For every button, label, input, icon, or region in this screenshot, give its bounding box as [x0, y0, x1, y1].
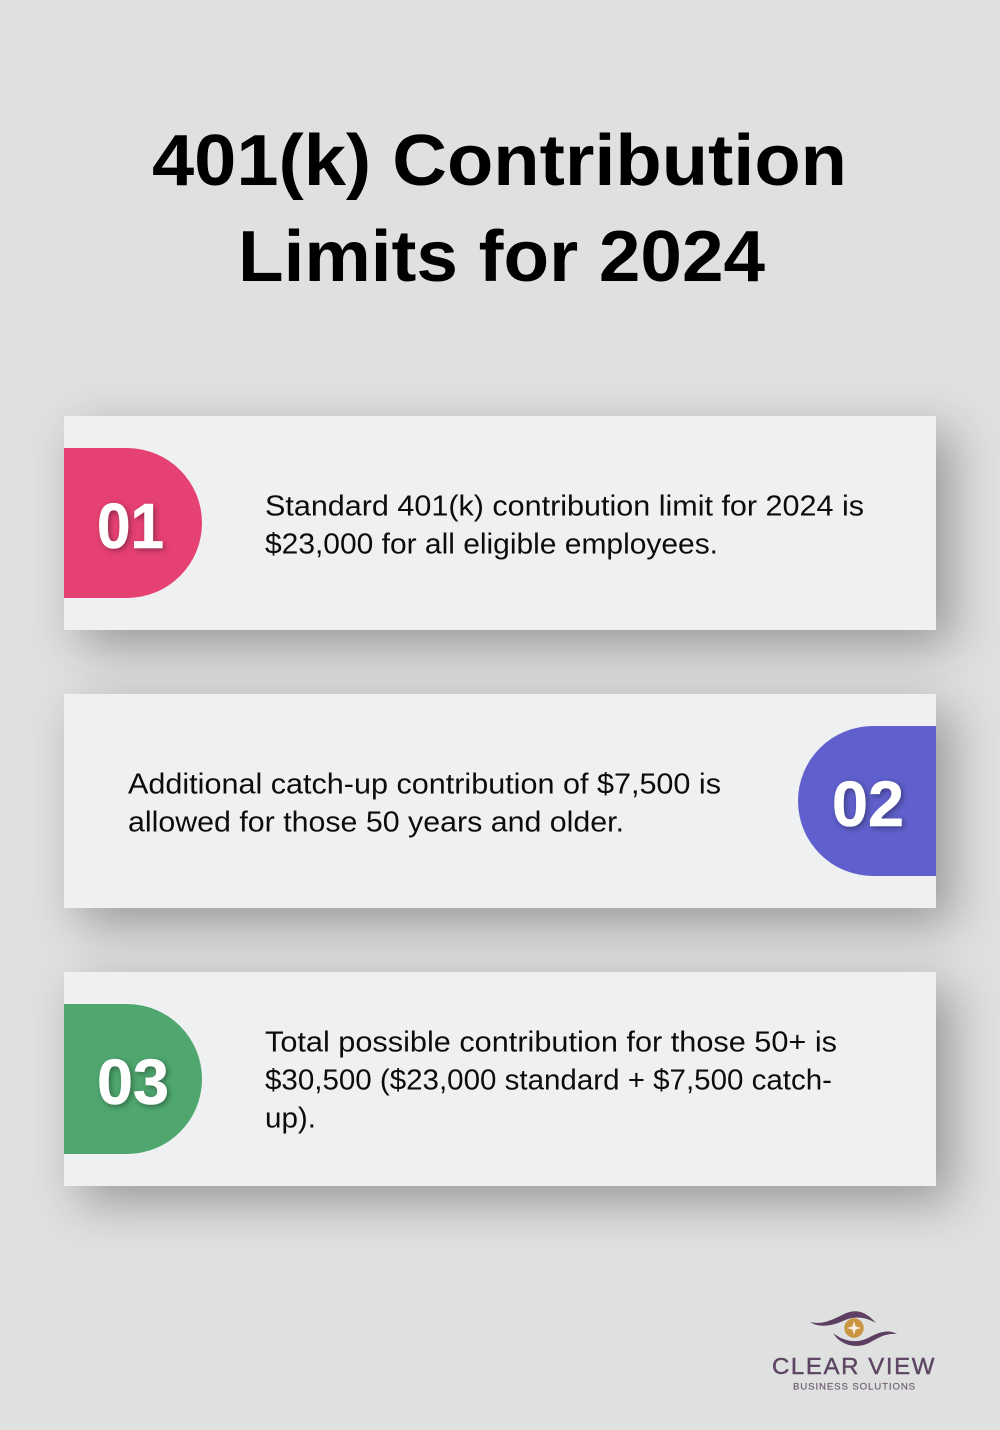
text: catch-up contribution: allowed for those 50 years and older.: [128, 806, 624, 838]
badge: 03: [64, 1004, 202, 1154]
text: total contribution: $30,500 ($23,000 standard + $7,500 catch-: [265, 1064, 832, 1096]
number 03: 03: [97, 1046, 169, 1118]
number 01: 01: [97, 490, 164, 562]
icon: eye: [810, 1311, 897, 1346]
title: [152, 121, 847, 297]
badge: 01: [64, 448, 202, 598]
text: standard limit: $23,000 for all eligible employees.: [265, 528, 718, 560]
logo tagline: BUSINESS SOLUTIONS: [793, 1382, 916, 1392]
number 02: 02: [832, 768, 904, 840]
title: 401(k) Contribution: [152, 121, 847, 201]
text: standard limit: Standard 401(k) contribution limit for 2024 is: [265, 490, 864, 522]
text: total contribution: Total possible contribution for those 50+ is: [265, 1026, 837, 1058]
text: total contribution: up).: [265, 1102, 316, 1134]
title: Limits for 2024: [238, 217, 765, 297]
panel: standard limit: [64, 416, 936, 630]
text: catch-up contribution: Additional catch-up contribution of $7,500 is: [128, 768, 721, 800]
logo wordmark: CLEAR VIEW: [772, 1353, 936, 1379]
panel: catch-up contribution: [64, 694, 936, 908]
badge: 02: [798, 726, 936, 876]
panel: total contribution: [64, 972, 936, 1186]
